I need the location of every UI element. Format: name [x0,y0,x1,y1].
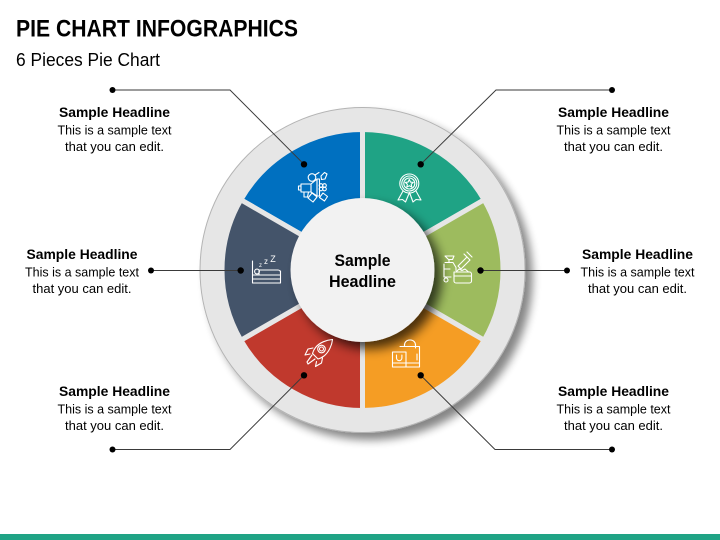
connector: middle left [148,267,244,274]
text block: middle left: that you can edit. [32,281,132,296]
icon: sleep letters: z [259,263,262,269]
icon: sleep letters [259,254,276,269]
text block: bottom left: Sample Headline [59,383,170,399]
text block: top right: This is a sample text [556,122,671,138]
text block: top left: This is a sample text [58,122,172,138]
icon: cleaning products [444,252,472,283]
icon: shopping bags [392,340,420,367]
text block: middle right: This is a sample text [580,264,695,280]
text block: middle left [25,246,139,296]
connector: top right [418,87,615,168]
text block: middle right [580,246,695,296]
segment: orange [362,270,484,410]
center headline: Sample [334,251,390,270]
segment: red [241,270,362,411]
segment: blue [241,129,362,270]
text block: bottom right: that you can edit. [564,418,663,433]
pie chart [200,108,525,432]
text block: top left [58,104,172,154]
connector: bottom left [110,372,307,452]
segment: lime [362,200,503,340]
text block: middle left: Sample Headline [26,246,138,262]
icon: rocket [305,340,332,366]
text block: top right: Sample Headline [558,104,669,120]
text block: bottom left: This is a sample text [58,402,172,416]
icon: sleep letters: Z [270,254,276,264]
text block: top right [556,104,671,154]
segment: green [362,130,484,270]
text block: bottom left [58,383,172,433]
text block: bottom right: This is a sample text [556,402,671,416]
text block: top left: that you can edit. [65,139,164,154]
bottom bar [0,534,720,540]
text block: bottom right: Sample Headline [558,383,669,399]
text block: top left: Sample Headline [59,104,170,120]
center headline: Headline [329,272,396,291]
center headline [329,251,396,291]
center circle [290,198,434,342]
text block: bottom right [556,383,671,433]
icon: bed and sleep [252,261,280,283]
icon: megaphone and tags [298,172,328,202]
connector: middle right [477,267,570,274]
connector: top left [110,87,307,168]
connector: bottom right [418,372,615,452]
subtitle: 6 Pieces Pie Chart [16,50,160,70]
icon: sleep letters: z [264,257,268,266]
outer disc [200,108,525,432]
text block: middle right: Sample Headline [582,246,693,262]
text block: bottom left: that you can edit. [65,418,164,433]
icon: award ribbon [398,174,421,202]
title: PIE CHART INFOGRAPHICS [16,16,298,42]
text block: top right: that you can edit. [564,139,663,154]
segment: navy [222,200,362,340]
text block: middle left: This is a sample text [25,264,139,280]
text block: middle right: that you can edit. [588,281,687,296]
